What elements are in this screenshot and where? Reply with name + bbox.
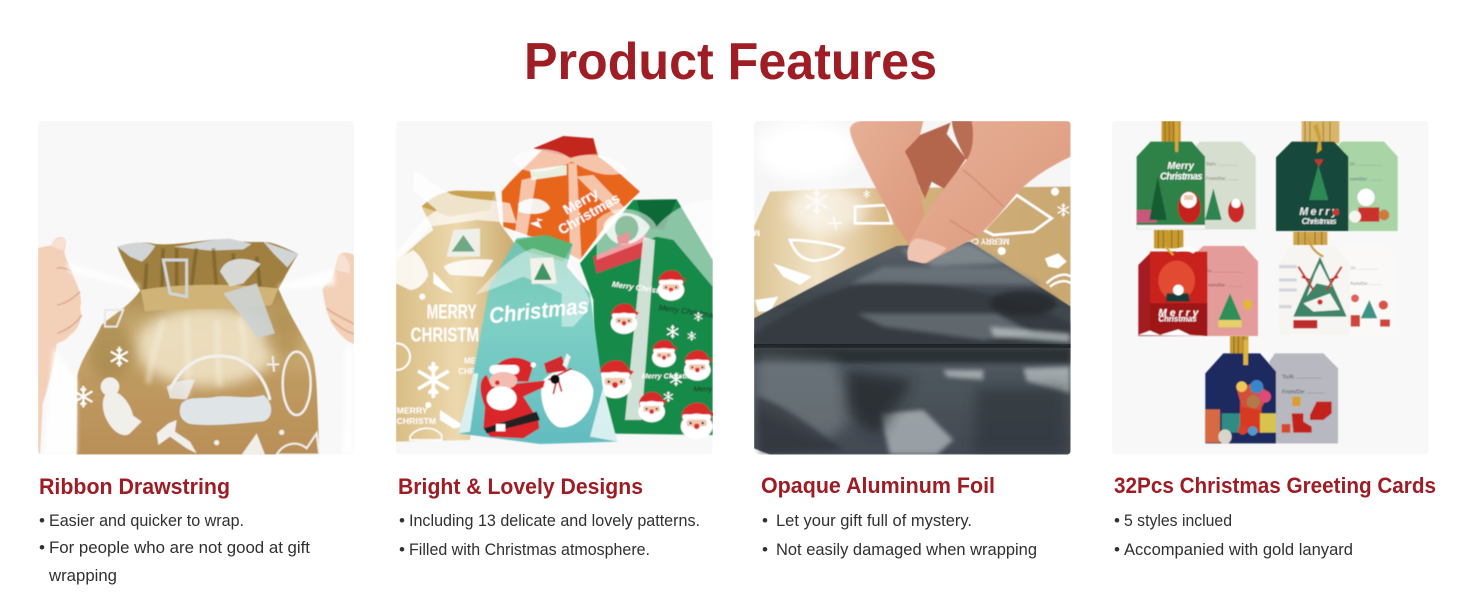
hand pinching foil: [850, 121, 1071, 263]
bullet: not easily damaged: Not easily damaged when wrapping: [776, 540, 1037, 559]
heading: opaque aluminum foil: Opaque Aluminum Foil: [761, 473, 995, 498]
card set: green merry christmas: [1137, 121, 1256, 229]
panel: ribbon drawstring photo: [38, 236, 354, 455]
gold bag: MERRY: [397, 405, 428, 415]
panel: christmas greeting cards photo: [1136, 121, 1399, 445]
card set: navy gifts: To/A: ................: [1282, 374, 1322, 380]
panel background: [38, 121, 354, 455]
gold bag: CHRISTM: [397, 416, 436, 426]
orange bag: Christmas: [555, 189, 623, 238]
bullet: mystery: Let your gift full of mystery.: [776, 511, 972, 530]
card set: dark green tree: Merry: [1299, 206, 1339, 218]
title: Product Features: [524, 33, 937, 91]
translucent ribbons: [43, 262, 354, 455]
green bag: Merry Christmas: [611, 280, 676, 297]
dark aluminum foil: [754, 242, 1071, 455]
card set: dark green tree: /A: ..................: [1350, 162, 1382, 168]
heading: 32pcs christmas greeting cards: 32Pcs Christmas Greeting Cards: [1114, 473, 1436, 498]
card set: red snow globe: Christmas: [1158, 315, 1197, 324]
bullet: 5 styles: 5 styles inclued: [1124, 511, 1232, 530]
card set: red snow globe: /A: .....................: [1207, 269, 1243, 275]
card set: red snow globe: [1138, 230, 1258, 336]
bullet: christmas atmosphere: Filled with Christmas atmosphere.: [409, 540, 650, 559]
green bag: Merry Christmas: [642, 371, 700, 380]
card set: green merry christmas: From/De: ........: [1206, 176, 1239, 182]
card set: red snow globe: rom/De: ...........: [1208, 283, 1243, 289]
gold bag: CHRIS: [458, 367, 484, 376]
bullet: 13 patterns: Including 13 delicate and lovely patterns.: [409, 511, 700, 530]
bullet: for people not good at gift wrapping: wrapping: [48, 566, 117, 585]
heading: ribbon drawstring: Ribbon Drawstring: [39, 474, 230, 499]
gold sheet with white print: [754, 186, 1071, 320]
bullet: easier and quicker: •: [39, 511, 45, 530]
heading: bright and lovely designs: Bright & Lovely Designs: [398, 474, 643, 499]
teal santa bag: Christmas: [488, 293, 590, 328]
left hand pulling ribbon: [38, 237, 82, 455]
gold sheet with white print: MERRY CHRISTMAS: [681, 228, 760, 237]
card set: white tree: /A: ................: [1351, 265, 1378, 270]
bullet: not easily damaged: •: [762, 540, 768, 559]
orange bag: [502, 136, 640, 263]
panel: bright and lovely designs photo: [383, 121, 717, 455]
gold drawstring bag: [74, 239, 319, 455]
bullet: gold lanyard: •: [1114, 540, 1120, 559]
bullet: mystery: •: [762, 511, 768, 530]
panel background: [1112, 121, 1429, 455]
column 2 copy: [398, 474, 700, 559]
card set: white tree: from/De: ..........: [1351, 281, 1383, 286]
gold bag: MERRY: [464, 356, 493, 365]
column 4 copy: [1114, 473, 1436, 559]
bullet: 13 patterns: •: [399, 511, 405, 530]
bullet: for people not good at gift wrapping: •: [39, 538, 45, 557]
green bag: [580, 199, 717, 439]
gold bag: CHRISTM: [411, 324, 479, 347]
card set: green merry christmas: Christmas: [1160, 171, 1203, 182]
bullet: gold lanyard: Accompanied with gold lanyard: [1124, 540, 1353, 559]
card set: navy gifts: From/De: ...........: [1282, 389, 1325, 395]
card set: dark green tree: rom/De: ..........: [1350, 177, 1383, 183]
card set: green merry christmas: Merry: [1167, 161, 1195, 172]
card set: dark green tree: Christmas: [1302, 216, 1337, 226]
panel: opaque aluminum foil photo: [681, 120, 1071, 455]
column 1 copy: [39, 474, 310, 585]
bullet: christmas atmosphere: •: [399, 540, 405, 559]
card set: red snow globe: Merry: [1158, 308, 1199, 319]
green bag: Merry Christmas: [658, 303, 717, 320]
bullet: easier and quicker: Easier and quicker to wrap.: [49, 511, 244, 530]
bullet: 5 styles: •: [1114, 511, 1120, 530]
card set: navy gifts: [1205, 336, 1338, 444]
gold bag: MERRY: [427, 300, 477, 323]
panel background: [396, 121, 713, 455]
right hand pulling ribbon: [323, 253, 354, 344]
teal santa bag: [458, 235, 617, 444]
gold bag: [396, 190, 517, 442]
green bag: Merry: [693, 385, 713, 394]
column 3 copy: [761, 473, 1037, 559]
card set: green merry christmas: To/A: ..............: [1206, 162, 1238, 168]
gold sheet with white print: MERRY CHRISTMAS: [931, 236, 1009, 245]
orange bag: Merry: [560, 185, 601, 218]
card set: dark green tree: [1276, 121, 1398, 231]
bullet: for people not good at gift wrapping: For people who are not good at gift: [49, 538, 310, 557]
card set: white tree: [1279, 232, 1397, 335]
panel background: [754, 121, 1071, 455]
